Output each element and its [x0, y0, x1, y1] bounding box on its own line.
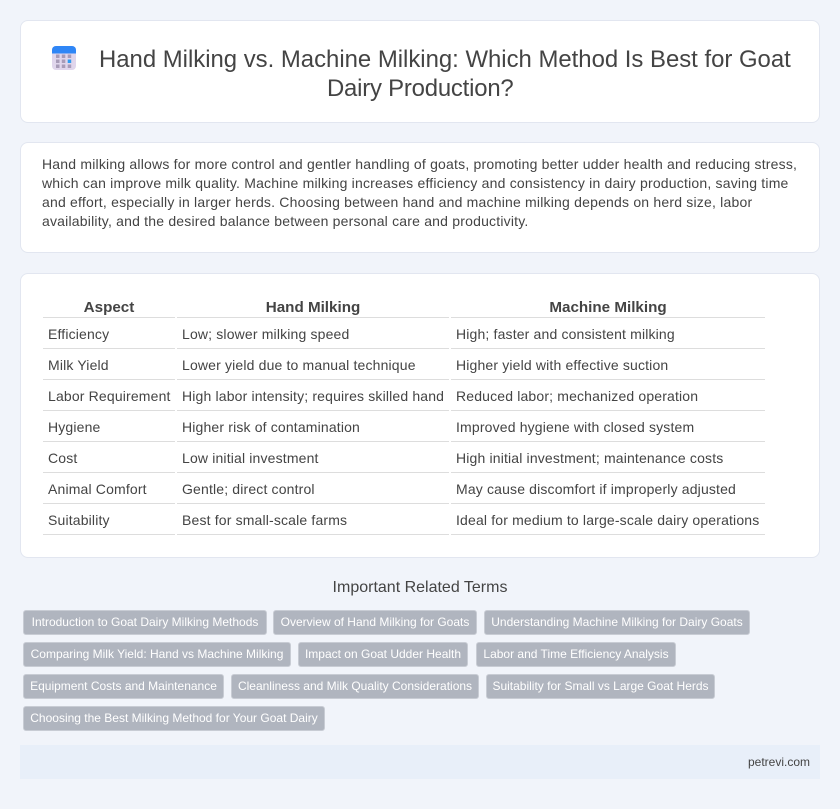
related term tags: Impact on Goat Udder Health	[305, 647, 461, 661]
comparison table: Suitability	[48, 512, 110, 528]
comparison table: May cause discomfort if improperly adjusted	[456, 481, 736, 497]
comparison table: Hygiene	[48, 419, 100, 435]
comparison table	[43, 299, 765, 535]
comparison table: Higher yield with effective suction	[456, 357, 668, 373]
title text	[99, 46, 791, 102]
comparison table: Lower yield due to manual technique	[182, 357, 416, 373]
comparison table: Milk Yield	[48, 357, 109, 373]
comparison table: Labor Requirement	[48, 388, 171, 404]
comparison table: Higher risk of contamination	[182, 419, 360, 435]
header: hand milking: Hand Milking	[266, 299, 360, 316]
footer source: petrevi.com	[748, 755, 810, 769]
related term tags: Cleanliness and Milk Quality Considerations	[238, 679, 472, 693]
intro card	[20, 142, 820, 253]
intro paragraph: and effort, especially in larger herds. Choosing between hand and machine milking depends on herd size, labor	[42, 194, 752, 210]
comparison table: Best for small-scale farms	[182, 512, 347, 528]
comparison table: Improved hygiene with closed system	[456, 419, 694, 435]
icon: calendar	[52, 46, 76, 70]
related term tags: Comparing Milk Yield: Hand vs Machine Milking	[31, 647, 283, 661]
related term tags: Labor and Time Efficiency Analysis	[483, 647, 669, 661]
comparison table: Animal Comfort	[48, 481, 147, 497]
title text: Hand Milking vs. Machine Milking: Which Method Is Best for Goat	[99, 46, 791, 73]
related term tags	[23, 610, 750, 731]
comparison table: Gentle; direct control	[182, 481, 315, 497]
intro paragraph: which can improve milk quality. Machine milking increases efficiency and consistency in dairy production, saving time	[42, 175, 789, 191]
related term tags: Suitability for Small vs Large Goat Herds	[492, 679, 709, 693]
comparison table: Ideal for medium to large-scale dairy operations	[456, 512, 759, 528]
related terms heading: Important Related Terms	[333, 579, 507, 596]
header: machine milking: Machine Milking	[549, 299, 667, 316]
intro paragraph: availability, and the desired balance between personal care and productivity.	[42, 213, 529, 229]
comparison table: Efficiency	[48, 326, 109, 342]
intro paragraph	[42, 156, 797, 229]
related term tags: Introduction to Goat Dairy Milking Methods	[32, 615, 258, 629]
title card	[20, 20, 820, 123]
comparison table: Low; slower milking speed	[182, 326, 349, 342]
comparison table: Reduced labor; mechanized operation	[456, 388, 698, 404]
comparison table: High labor intensity; requires skilled hand	[182, 388, 444, 404]
title text: Dairy Production?	[327, 75, 514, 102]
table card	[20, 273, 820, 558]
related term tags: Overview of Hand Milking for Goats	[281, 615, 469, 629]
comparison table: High; faster and consistent milking	[456, 326, 675, 342]
comparison table: High initial investment; maintenance costs	[456, 450, 723, 466]
header: aspect: Aspect	[84, 299, 134, 316]
related term tags: Choosing the Best Milking Method for Your Goat Dairy	[30, 711, 318, 725]
related term tags: Understanding Machine Milking for Dairy Goats	[491, 615, 743, 629]
comparison table: Low initial investment	[182, 450, 319, 466]
related term tags: Equipment Costs and Maintenance	[30, 679, 217, 693]
intro paragraph: Hand milking allows for more control and gentler handling of goats, promoting better udder health and reducing stress,	[42, 156, 797, 172]
comparison table: Cost	[48, 450, 77, 466]
footer bar	[20, 745, 820, 779]
